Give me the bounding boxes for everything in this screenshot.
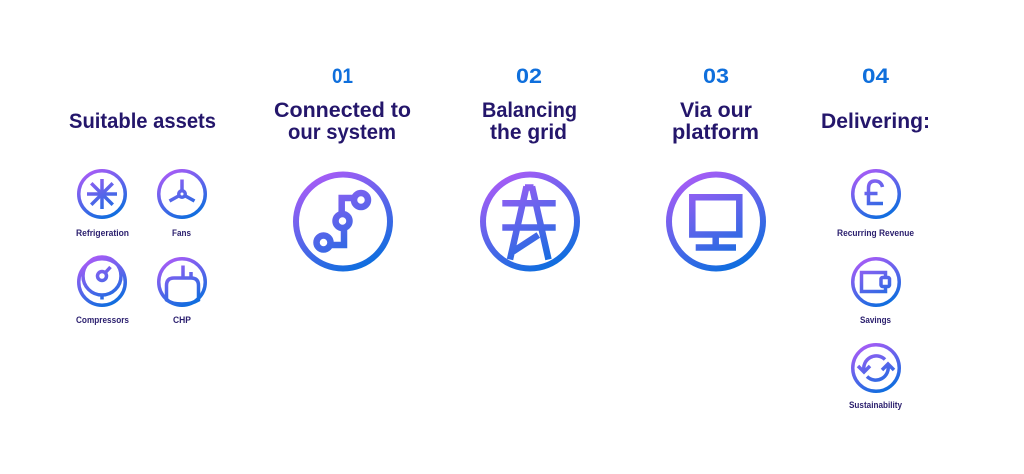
icon: wallet: [853, 259, 899, 305]
panel: step 04 delivering: [821, 65, 930, 410]
panel: suitable assets: [69, 110, 216, 325]
label: recurring revenue: Recurring Revenue: [837, 228, 914, 238]
icon: pound sign: [853, 171, 899, 217]
heading: via our platform: platform: [672, 121, 759, 144]
heading: connected to our system: [274, 99, 411, 144]
icon: refrigeration: [79, 171, 125, 217]
icon: sustainability arrows: [853, 345, 899, 391]
icon: fans: [159, 171, 205, 217]
icon: connected nodes: [296, 174, 390, 268]
heading: delivering: Delivering:: [821, 110, 930, 133]
icon: electricity pylon: [483, 174, 577, 268]
number: 03: 03: [703, 65, 729, 88]
label: refrigeration: Refrigeration: [76, 228, 129, 238]
label: CHP: CHP: [173, 315, 191, 325]
number: 04: 04: [862, 65, 889, 88]
label: fans: Fans: [172, 228, 191, 238]
heading: balancing the grid: Balancing: [482, 99, 577, 122]
heading: via our platform: [672, 99, 759, 144]
panel: step 03: [669, 65, 763, 268]
heading: balancing the grid: the grid: [490, 121, 567, 144]
heading: suitable assets: Suitable assets: [69, 110, 216, 133]
heading: balancing the grid: [482, 99, 577, 144]
panel: step 01: [274, 65, 411, 268]
number: 02: 02: [516, 65, 542, 88]
icon: compressors: [79, 257, 125, 305]
panel: step 02: [482, 65, 577, 268]
label: sustainability: Sustainability: [849, 400, 902, 410]
number: 01: 01: [332, 65, 353, 88]
icon: monitor: [669, 174, 763, 268]
heading: connected to our system: Connected to: [274, 99, 411, 122]
label: compressors: Compressors: [76, 315, 129, 325]
icon: CHP: [159, 259, 205, 305]
heading: via our platform: Via our: [680, 99, 752, 122]
heading: connected to our system: our system: [288, 121, 396, 144]
label: savings: Savings: [860, 315, 891, 325]
